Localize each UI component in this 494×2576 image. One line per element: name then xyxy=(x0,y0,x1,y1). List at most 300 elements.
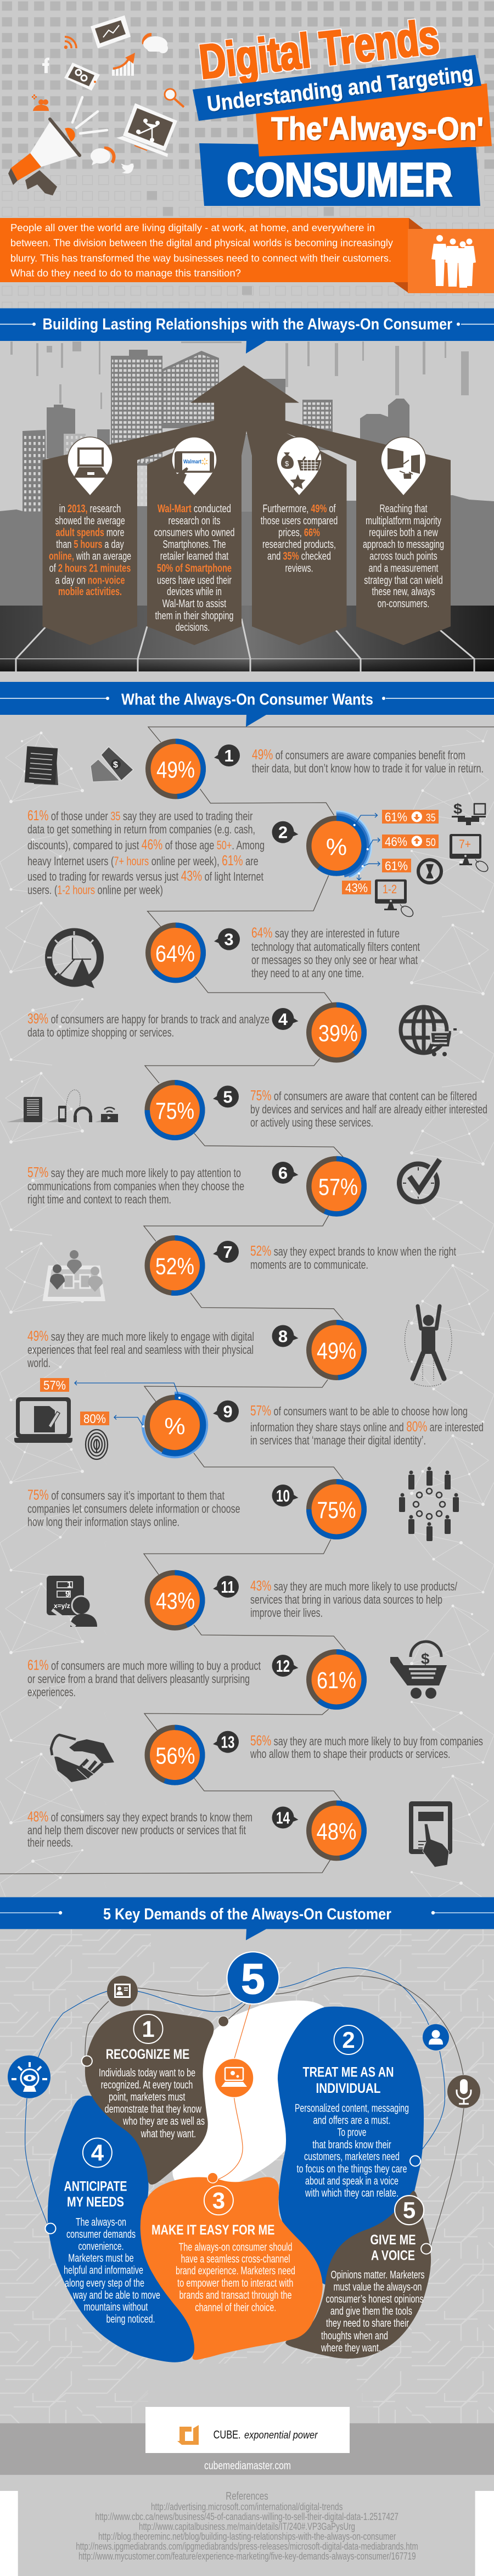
icon: fingerprint xyxy=(86,1430,108,1459)
ring 75% xyxy=(147,1083,203,1138)
body text: consumer’s honest opinions xyxy=(326,2293,424,2305)
column 4: Reaching that xyxy=(380,503,428,515)
badge 13 xyxy=(213,1731,239,1753)
icon: laptop xyxy=(116,103,177,157)
text 10: 75% of consumers say it’s important to them that xyxy=(27,1487,224,1503)
ring 39% xyxy=(309,1005,364,1060)
heading: A VOICE xyxy=(371,2248,415,2264)
heading: RECOGNIZE ME xyxy=(106,2047,189,2062)
ring 52%: 52% xyxy=(155,1253,194,1280)
badge 1: 1 xyxy=(224,746,234,765)
stat labels: 57% xyxy=(43,1378,66,1392)
icon: shopping cart with dollar: $ xyxy=(421,1650,430,1667)
body text: Marketers must be xyxy=(68,2253,134,2265)
ring 49%: 49% xyxy=(317,1338,356,1364)
item 6 xyxy=(27,1158,440,1214)
body text: and give them the tools xyxy=(330,2305,412,2317)
item 1 xyxy=(25,741,484,797)
icon: hourglass xyxy=(418,860,441,883)
text 6 xyxy=(27,1164,244,1206)
header band xyxy=(0,1897,494,1940)
column 2: consumers who owned xyxy=(154,527,235,539)
white side margins xyxy=(0,2491,494,2576)
icon: magnifier xyxy=(165,89,184,107)
body text: helpful and informative xyxy=(64,2264,143,2276)
text 6: right time and context to reach them. xyxy=(27,1192,171,1206)
item 3 xyxy=(47,925,420,988)
text 11: improve their lives. xyxy=(250,1606,323,1620)
ring 43% xyxy=(147,1572,203,1628)
column 2: them in their shopping xyxy=(155,610,234,622)
icon: rss xyxy=(65,37,76,48)
intro text: blurry. This has transformed the way businesses need to connect with their customers. xyxy=(10,253,391,264)
connector node: brown dot xyxy=(218,2016,228,2026)
icon: money: $ xyxy=(113,760,118,770)
body text: channel of their choice. xyxy=(195,2301,276,2314)
connector node: individual xyxy=(410,2155,420,2166)
footer band xyxy=(0,2407,494,2475)
icon: scale: $ xyxy=(453,800,463,817)
item 8 xyxy=(27,1306,452,1386)
text 14: their needs. xyxy=(27,1836,73,1850)
section: 5 Key Demands xyxy=(0,1897,494,2424)
body text: convenience. xyxy=(78,2241,124,2253)
body text: they need to share their xyxy=(326,2317,409,2329)
column 2 xyxy=(154,437,235,634)
column 1: showed the average xyxy=(55,515,125,527)
number 5 xyxy=(395,2196,424,2225)
icon: money xyxy=(91,747,133,782)
header band xyxy=(0,309,494,354)
ring 61%: 61% xyxy=(317,1667,356,1694)
icon: people silhouettes xyxy=(431,235,476,288)
badge 5: 5 xyxy=(223,1087,233,1106)
stat labels xyxy=(40,1378,109,1426)
badge 10: 10 xyxy=(276,1486,290,1505)
text 3: they need to at any one time. xyxy=(251,966,364,980)
text 12: experiences. xyxy=(27,1685,76,1699)
stat labels: 35 xyxy=(426,812,436,824)
text 13 xyxy=(250,1732,483,1761)
text 14: 48% of consumers say they expect brands to know them xyxy=(27,1808,252,1825)
icon: person jumping xyxy=(405,1306,452,1386)
ring 43%: 43% xyxy=(156,1588,195,1615)
text 6: communications from companies when they choose the xyxy=(27,1179,244,1193)
body text: mountains without xyxy=(84,2301,148,2314)
text 7: moments are to communicate. xyxy=(250,1258,368,1272)
ring 57% xyxy=(309,1158,364,1214)
icon: tablet with hand xyxy=(409,1801,452,1867)
icon: shopping pin: $ xyxy=(285,460,289,468)
icon: id card xyxy=(107,1976,138,2007)
text 2: data to get something in return from companies (e.g. cash, xyxy=(27,822,255,836)
text 4: 39% of consumers are happy for brands to track and analyze xyxy=(27,1010,270,1027)
heading xyxy=(370,2232,416,2264)
stat labels xyxy=(342,810,439,895)
column 1: online, with an average xyxy=(49,551,131,563)
badge 2 xyxy=(272,821,299,843)
body text: with which they can relate. xyxy=(305,2187,398,2199)
badge 11 xyxy=(213,1576,239,1598)
text 9 xyxy=(250,1402,484,1447)
number 5: 5 xyxy=(403,2197,416,2223)
blob 3: make it easy for me xyxy=(141,2177,323,2360)
item 5 xyxy=(7,1083,487,1138)
icon: connected devices xyxy=(7,1090,118,1122)
text 10: how long their information stays online. xyxy=(27,1515,179,1529)
intro text: between. The division between the digital and physical worlds is becoming increasingly xyxy=(10,237,394,248)
number 4: 4 xyxy=(91,2140,104,2165)
text 12: or service from a brand that delivers pleasantly surprising xyxy=(27,1672,250,1686)
text 6: 57% say they are much more likely to pay attention to xyxy=(27,1164,241,1180)
connector node: voice xyxy=(421,2243,431,2254)
heading xyxy=(64,2179,127,2210)
item 13 xyxy=(51,1727,483,1783)
body text: recognized. At every touch xyxy=(101,2079,193,2091)
icon: shopping cart with dollar xyxy=(390,1642,447,1699)
ribbon: CONSUMER background xyxy=(199,143,480,206)
icon: formula and person: x=y/z xyxy=(54,1602,70,1610)
column 3: researched products, xyxy=(262,539,336,551)
ring 56%: 56% xyxy=(156,1743,195,1769)
icon: monitor 1-2: 1-2 xyxy=(383,882,397,896)
icon: microphone xyxy=(447,2075,480,2108)
body text: thoughts when and xyxy=(321,2330,388,2342)
column 2: Wal-Mart conducted xyxy=(158,503,231,515)
text 3: technology that automatically filters content xyxy=(251,940,420,954)
icon: monitor 1-2 xyxy=(375,880,415,919)
references xyxy=(76,2490,418,2562)
section: What the Always-On Consumer Wants xyxy=(0,682,494,1897)
column 1: mobile activities. xyxy=(58,586,122,598)
body text: way and be able to move xyxy=(72,2289,160,2301)
icon: formula and person xyxy=(47,1576,97,1627)
badge 1 xyxy=(214,744,240,766)
network background xyxy=(0,727,494,1897)
arrow structure with four columns xyxy=(43,366,451,645)
blob 5: give me a voice xyxy=(285,2191,431,2359)
item 9 xyxy=(14,1378,484,1459)
blob 2: treat me as an individual xyxy=(278,2007,424,2285)
icon: twitter bird xyxy=(121,164,134,173)
ring with extra arcs: % xyxy=(164,1413,186,1440)
number 4 xyxy=(83,2138,112,2168)
logo box xyxy=(145,2407,350,2453)
badge 6: 6 xyxy=(278,1163,288,1183)
ring 64%: 64% xyxy=(155,940,195,967)
stat labels: 46% xyxy=(385,835,407,849)
icon: formula and person: 1 xyxy=(67,1580,71,1589)
arrows for 57% and 80% xyxy=(75,1381,181,1427)
badge 3 xyxy=(214,928,240,950)
body text: point, marketers must xyxy=(109,2091,186,2103)
column 4: approach to messaging xyxy=(363,539,444,551)
number 3: 3 xyxy=(212,2187,225,2214)
stat labels: 43% xyxy=(345,881,368,895)
badge 14: 14 xyxy=(276,1808,290,1827)
icon: phone with gears xyxy=(64,63,100,91)
ring with layered arcs: % xyxy=(326,835,347,861)
text 2: discounts), compared to just 46% of those age 50+. Among xyxy=(27,836,265,853)
road xyxy=(0,606,494,671)
badge 7 xyxy=(213,1241,239,1263)
badge 7: 7 xyxy=(223,1242,233,1262)
body text: The always-on xyxy=(76,2216,126,2228)
heading xyxy=(303,2065,394,2096)
ring 49% xyxy=(148,741,203,797)
text 3 xyxy=(251,925,420,980)
badge 12: 12 xyxy=(276,1656,290,1676)
badge 10 xyxy=(272,1485,299,1507)
text 2: users. (1-2 hours online per week) xyxy=(27,883,163,897)
body text: to empower them to interact with xyxy=(177,2277,293,2289)
text 5 xyxy=(250,1087,487,1129)
website: cubemediamaster.com xyxy=(204,2460,291,2472)
column 3: Furthermore, 49% of xyxy=(262,503,336,515)
body text: and offers are a must. xyxy=(313,2115,391,2127)
column 2: retailer learned that xyxy=(160,551,229,563)
column 1 xyxy=(49,437,131,598)
big 5 circle: 5 xyxy=(241,1955,265,2003)
text 5: or actively using these services. xyxy=(250,1116,373,1129)
intro text xyxy=(10,222,394,279)
column 1: adult spends more xyxy=(56,527,124,539)
ring 64% xyxy=(148,925,203,981)
intro ribbon xyxy=(0,218,494,293)
logo text: CUBE. xyxy=(214,2429,241,2441)
section: Building Lasting Relationships xyxy=(0,309,494,671)
badge 2: 2 xyxy=(278,823,288,842)
body text: The always-on consumer should xyxy=(179,2241,292,2253)
logo text: exponential power xyxy=(244,2430,318,2441)
text 7 xyxy=(250,1242,456,1272)
text 12: 61% of consumers are much more willing to buy a product xyxy=(27,1657,261,1673)
stat labels: 61% xyxy=(385,810,407,824)
ground silhouette xyxy=(0,495,494,606)
logo text xyxy=(214,2429,318,2441)
text 14: and help them discover new products or services that fit xyxy=(27,1823,246,1837)
badge 8 xyxy=(272,1325,299,1347)
ring 49%: 49% xyxy=(156,757,195,783)
body text: must value the always-on xyxy=(334,2281,422,2293)
icon: laptop gears xyxy=(215,2059,254,2097)
heading: MY NEEDS xyxy=(67,2194,124,2210)
column 2: research on its xyxy=(168,515,221,527)
badge 8: 8 xyxy=(278,1326,288,1346)
column 1: of 2 hours 21 minutes xyxy=(49,562,131,574)
column 4: these new, always xyxy=(372,586,435,598)
ring with layered arcs xyxy=(302,811,371,881)
text 8: 49% say they are much more likely to engage with digital xyxy=(27,1328,254,1344)
icon: handshake xyxy=(51,1735,114,1782)
body text: who they are as well as xyxy=(122,2115,205,2127)
text 14 xyxy=(27,1808,252,1850)
column 1: in 2013, research xyxy=(59,503,121,515)
icon: monitor 7+: 7+ xyxy=(459,837,471,851)
ring 75%: 75% xyxy=(317,1497,356,1524)
text 9: in services that ‘manage their digital identity’. xyxy=(250,1433,426,1447)
ring 52% xyxy=(147,1238,203,1293)
column 2: decisions. xyxy=(176,621,210,634)
icon: growth bars and arrow xyxy=(112,53,135,76)
body text xyxy=(176,2241,295,2314)
badge 13: 13 xyxy=(221,1733,235,1752)
ring 56% xyxy=(147,1727,203,1783)
body text: where they want. xyxy=(321,2342,381,2354)
header background squares xyxy=(0,0,494,309)
column 1: than 5 hours a day xyxy=(56,539,124,551)
text 3: 64% say they are interested in future xyxy=(251,925,400,941)
header band xyxy=(0,682,494,727)
column 4: across touch points xyxy=(369,551,437,563)
text 12 xyxy=(27,1657,261,1699)
text 10: companies let consumers delete information or choose xyxy=(27,1502,240,1515)
icon: laptop with document xyxy=(14,1397,72,1443)
references: References xyxy=(226,2490,268,2502)
icon: cloud xyxy=(143,35,168,53)
body text: demonstrate that they know xyxy=(105,2103,201,2115)
icon: map with pins xyxy=(43,1250,105,1301)
icon: eye webcam xyxy=(8,2056,50,2098)
number 1: 1 xyxy=(142,2016,155,2042)
heading: 5 Key Demands of the Always-On Customer xyxy=(103,1906,391,1923)
badge 3: 3 xyxy=(224,930,234,949)
ring 75% xyxy=(309,1482,364,1537)
badge 4 xyxy=(272,1008,299,1030)
number 2 xyxy=(334,2025,363,2054)
body text: what they want. xyxy=(141,2128,196,2140)
references: http://advertising.microsoft.com/international/digital-trends xyxy=(151,2501,343,2512)
big 5 circle xyxy=(227,1952,279,2004)
column 4 xyxy=(363,437,444,610)
intro text: People all over the world are living digitally - at work, at home, and everywhere in xyxy=(10,222,375,233)
text 4 xyxy=(27,1010,270,1039)
text 11 xyxy=(250,1577,458,1620)
number 3 xyxy=(204,2186,233,2215)
header icons: megaphone and social media xyxy=(8,15,184,195)
body text: being noticed. xyxy=(106,2314,155,2326)
text 2 xyxy=(27,807,265,897)
column 3: those users compared xyxy=(261,515,338,527)
column 3: and 35% checked xyxy=(267,551,331,563)
body text xyxy=(295,2103,409,2199)
buildings xyxy=(23,350,409,518)
badge 11: 11 xyxy=(221,1577,235,1597)
connector node: easy xyxy=(207,2172,218,2183)
icon: Walmart tablet pin xyxy=(172,437,217,496)
icon: laptop pin xyxy=(68,437,113,496)
connector node: anticipate xyxy=(45,2224,56,2233)
text 4: data to optimize shopping or services. xyxy=(27,1026,174,1039)
blob 4: anticipate my needs xyxy=(48,2096,195,2362)
item 7 xyxy=(43,1238,456,1301)
body text xyxy=(321,2269,425,2354)
references: http://www.capitalbusiness.me/main/details/IT/240#.VP3GaPysUrg xyxy=(139,2521,355,2532)
circuit background xyxy=(0,1929,494,2424)
body text: that brands know their xyxy=(312,2139,391,2151)
text 2: 61% of those under 35 say they are used to trading their xyxy=(27,807,252,824)
text 10 xyxy=(27,1487,240,1529)
badge 9: 9 xyxy=(223,1402,233,1421)
body text: about and speak in a voice xyxy=(305,2175,398,2187)
column 2: 50% of Smartphone xyxy=(157,562,232,574)
icon: user xyxy=(423,2024,449,2051)
column 1: a day on non-voice xyxy=(55,574,125,586)
body text: have a seamless cross-channel xyxy=(181,2253,290,2265)
text 8: experiences that feel real and seamless with their physical xyxy=(27,1343,254,1357)
column 4: requires both a new xyxy=(369,527,438,539)
icon: people network xyxy=(399,1467,459,1541)
connector node: recognize xyxy=(82,2056,92,2067)
icon: clock check xyxy=(400,1160,440,1202)
ring 48% xyxy=(309,1803,364,1858)
badge 14 xyxy=(272,1806,299,1828)
ring 49% xyxy=(309,1323,364,1377)
ribbon: Always-On background xyxy=(256,83,492,156)
badge 6 xyxy=(272,1162,299,1184)
body text: to focus on the things they care xyxy=(296,2163,407,2175)
heading: ANTICIPATE xyxy=(64,2179,127,2194)
badge 9 xyxy=(213,1401,239,1423)
column 4: and a measurement xyxy=(369,562,439,574)
badge 12 xyxy=(272,1655,299,1677)
body text: Personalized content, messaging xyxy=(295,2103,409,2115)
icon: scale xyxy=(452,800,486,825)
body text: Opinions matter. Marketers xyxy=(330,2269,425,2281)
column 4: on-consumers. xyxy=(378,598,429,610)
icon: formula and person: 9 xyxy=(65,1589,70,1599)
icon: multiplatform pin xyxy=(381,437,426,496)
white blob xyxy=(172,2001,324,2192)
body text xyxy=(99,2067,205,2140)
column 2: users have used their xyxy=(157,574,232,586)
ring 75%: 75% xyxy=(155,1098,194,1124)
heading: TREAT ME AS AN xyxy=(303,2065,394,2080)
heading: MAKE IT EASY FOR ME xyxy=(151,2222,274,2238)
ring 57%: 57% xyxy=(318,1174,358,1201)
heading: INDIVIDUAL xyxy=(316,2081,381,2096)
icon: add user xyxy=(32,94,49,111)
connector lines xyxy=(0,727,494,1874)
icon: documents xyxy=(25,746,58,785)
item 11 xyxy=(47,1572,458,1628)
icon: megaphone xyxy=(8,97,107,195)
icon: facebook xyxy=(42,58,49,73)
icon: Walmart tablet pin: Walmart xyxy=(183,459,202,465)
column 3: prices, 66% xyxy=(278,527,320,539)
column 4: multiplatform majority xyxy=(366,515,441,527)
stat labels: 61% xyxy=(385,859,408,873)
column 3 xyxy=(261,437,338,574)
item 4 xyxy=(27,1005,457,1060)
number 1 xyxy=(134,2014,162,2043)
badge 5 xyxy=(213,1085,239,1107)
text 1 xyxy=(252,746,484,775)
item 14 xyxy=(27,1801,452,1867)
body text: consumer demands xyxy=(66,2228,136,2241)
text 2: heavy Internet users (7+ hours online per week), 61% are xyxy=(27,852,259,869)
ring 39%: 39% xyxy=(318,1020,358,1046)
column 2: devices while in xyxy=(167,586,222,598)
item 12 xyxy=(27,1642,447,1707)
references: http://www.cbc.ca/news/business/45-of-canadians-willing-to-sell-their-digital-data-1.2517427 xyxy=(95,2511,398,2522)
item 10 xyxy=(27,1467,459,1541)
title: CONSUMER: CONSUMER xyxy=(227,154,452,206)
icon: shopping pin xyxy=(277,437,322,496)
body text: brand experience. Marketers need xyxy=(176,2265,295,2277)
heading: What the Always-On Consumer Wants xyxy=(121,691,373,709)
intro text: What do they need to do to manage this transition? xyxy=(10,267,241,279)
